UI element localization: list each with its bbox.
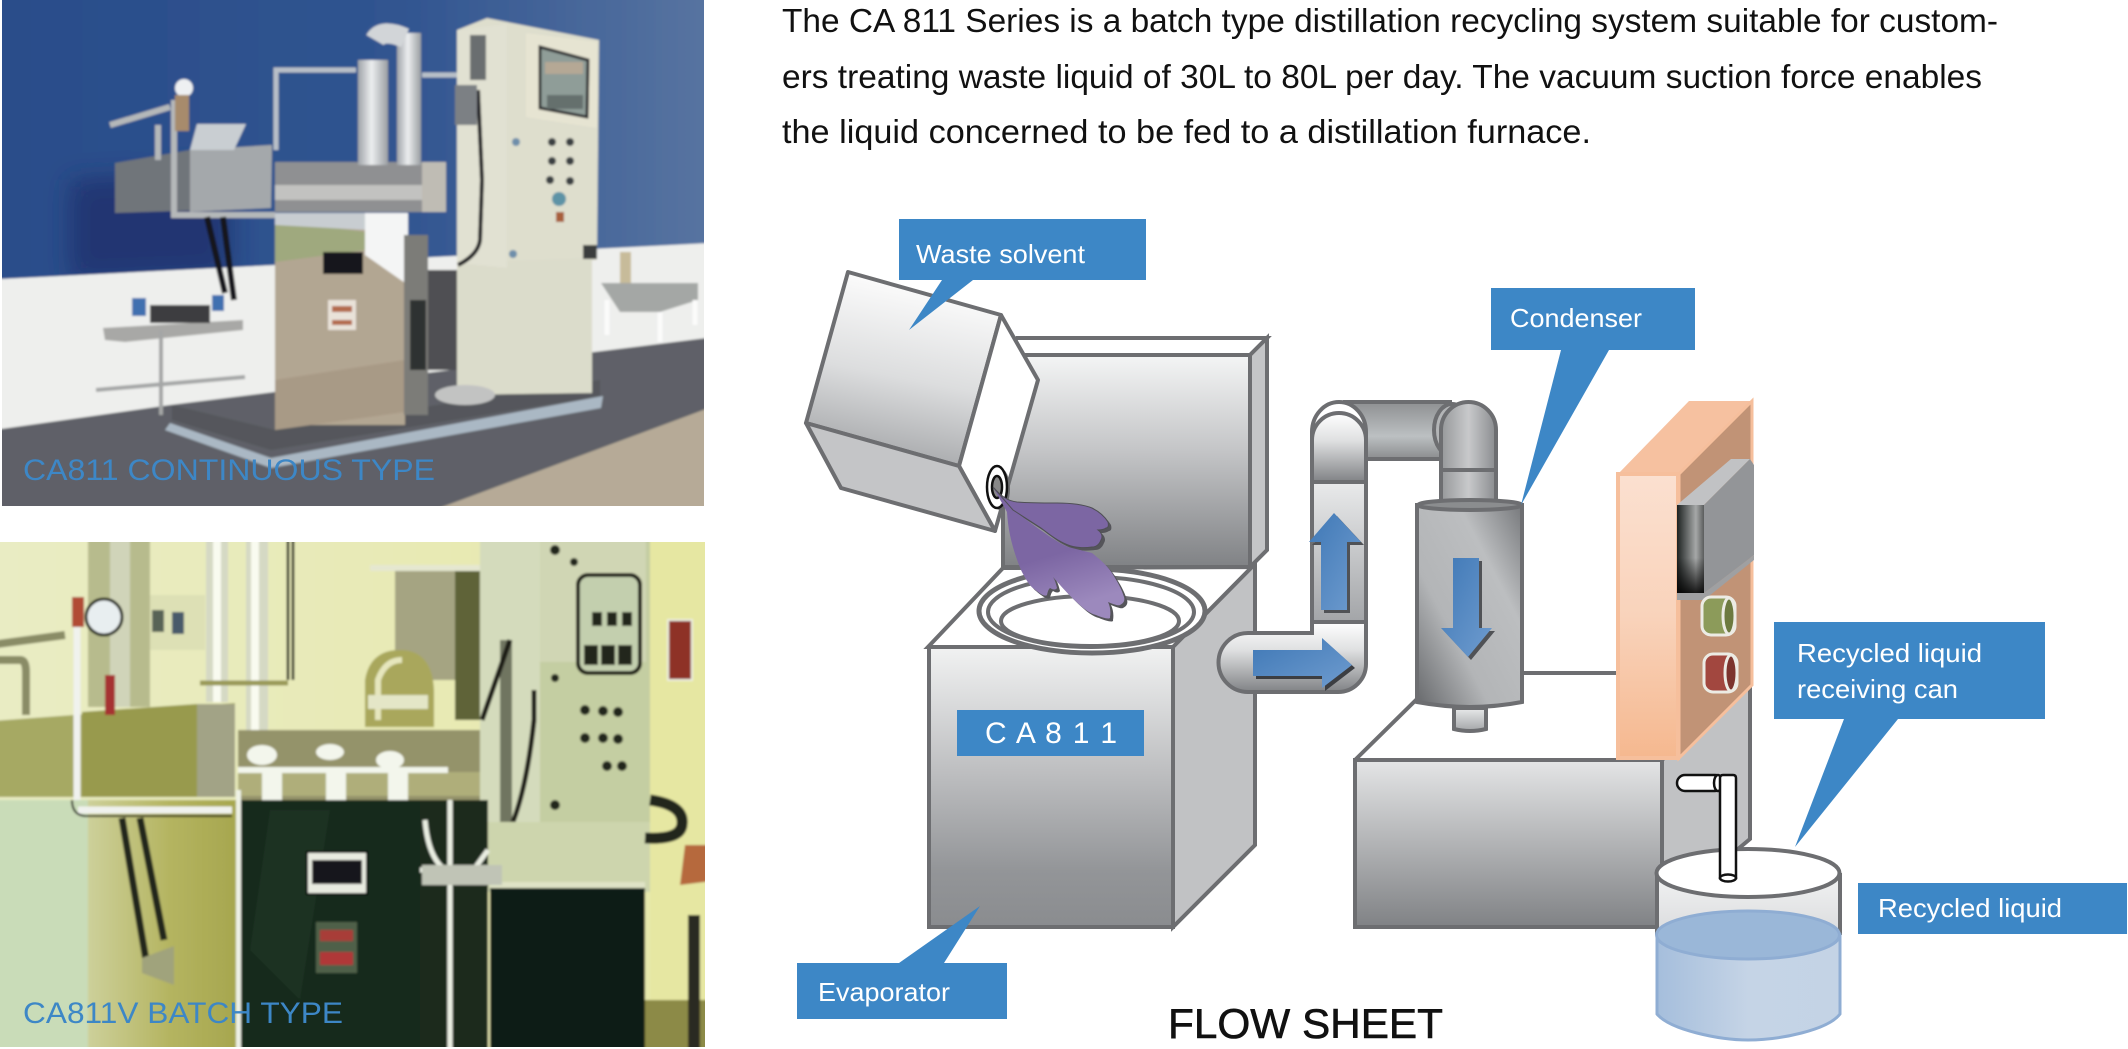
white wall [0, 242, 730, 432]
callout: evaporator: Evaporator [818, 977, 950, 1007]
display box [1677, 459, 1750, 505]
recycled liquid water [1657, 935, 1840, 1040]
label: recycled liquid: Recycled liquid [1878, 893, 2062, 923]
intro text [782, 2, 1998, 150]
hoses and valves [207, 217, 234, 300]
hoses [122, 818, 164, 960]
intro text: ers treating waste liquid of 30L to 80L per day. The vacuum suction force enables [782, 58, 1982, 95]
callout: waste solvent: Waste solvent [916, 239, 1086, 269]
right wall details [650, 542, 705, 1000]
pipe: inlet and riser [1218, 402, 1450, 692]
hopper box [0, 703, 235, 797]
pipe: condenser elbow [1434, 402, 1496, 502]
red button [1704, 654, 1737, 692]
arrows [1253, 513, 1495, 691]
lid assembly [238, 730, 480, 800]
machine base [165, 396, 603, 468]
gauge and left piping [0, 635, 65, 715]
lower door [490, 885, 645, 1049]
tall box [394, 570, 457, 681]
photo: CA811V batch type [0, 530, 730, 1049]
intro text: the liquid concerned to be fed to a distillation furnace. [782, 113, 1591, 150]
intro text: The CA 811 Series is a batch type distillation recycling system suitable for custom- [782, 2, 1998, 39]
wall plate [150, 595, 205, 650]
duct [88, 530, 150, 707]
behind cabinet works [427, 270, 457, 370]
control cabinet [480, 530, 540, 832]
indicator plate [316, 922, 357, 973]
columns [358, 60, 388, 165]
evaporator opening ring [979, 569, 1205, 653]
callout: recycled liquid receiving can: Recycled liquid [1797, 638, 1982, 668]
floor [2, 337, 704, 506]
label: CA811 [957, 710, 1144, 756]
callout: waste solvent [899, 219, 1146, 330]
label: CA811 CONTINUOUS TYPE [23, 454, 435, 487]
evaporator [928, 565, 1255, 927]
label: CA811V BATCH TYPE [23, 997, 343, 1030]
outlet spout [1677, 775, 1736, 882]
callout: condenser: Condenser [1510, 303, 1642, 333]
condenser [1417, 500, 1522, 731]
callout: recycled liquid receiving can [1774, 622, 2045, 847]
lid assembly [275, 162, 445, 212]
name plate [307, 852, 367, 894]
sink [601, 283, 698, 312]
waste solvent container [806, 272, 1038, 531]
elbow duct [365, 650, 434, 727]
green button [1702, 597, 1735, 635]
callout: evaporator [797, 906, 1007, 1019]
callout: recycled liquid receiving can: receiving can [1797, 674, 1958, 704]
cabinet [457, 18, 599, 268]
pipes left [110, 100, 275, 215]
vertical pipes [206, 530, 268, 732]
centre piping [420, 800, 488, 1049]
control panel [1618, 401, 1754, 758]
container nozzle [987, 466, 1010, 510]
blue wall [0, 0, 730, 285]
stainless box [275, 213, 405, 425]
receiver base unit [1355, 673, 1750, 927]
black cabinet [238, 800, 420, 1049]
photo: CA811 continuous type [0, 0, 730, 530]
label: CA811: C A 8 1 1 [985, 717, 1117, 750]
hopper [114, 148, 190, 214]
label: recycled liquid [1858, 883, 2127, 934]
upper hopper box [1003, 338, 1267, 567]
flow sheet diagram [806, 272, 1840, 1040]
heading: flow sheet: FLOW SHEET [1168, 1000, 1443, 1047]
purple waste liquid [993, 487, 1127, 621]
wall [0, 542, 652, 1047]
callout: condenser [1491, 288, 1695, 505]
receiving can [1656, 849, 1840, 1040]
